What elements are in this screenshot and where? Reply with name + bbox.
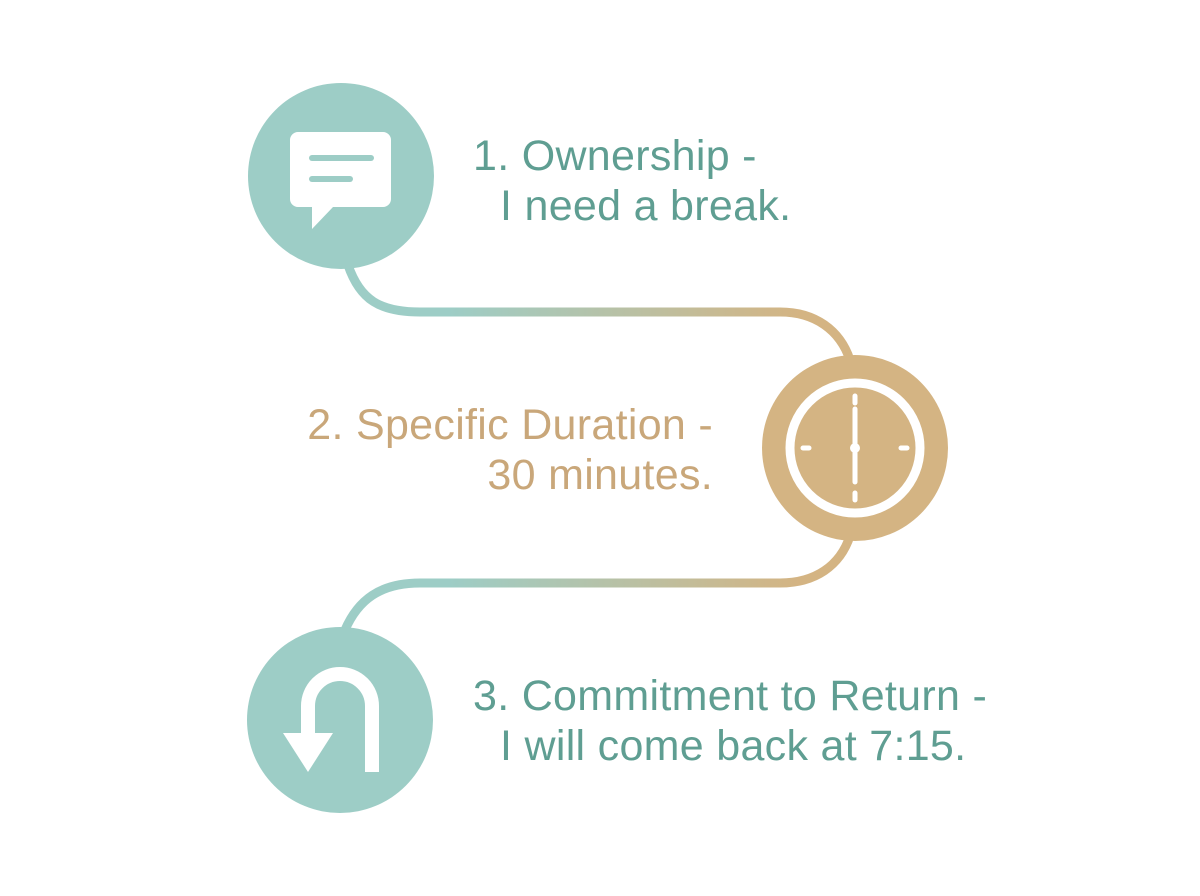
text: step 2: 2. Specific Duration - — [307, 401, 713, 449]
text: step 2 — [307, 401, 713, 499]
text: step 1 — [473, 132, 791, 230]
text: step 1: I need a break. — [500, 182, 791, 230]
text: step 1: 1. Ownership - — [473, 132, 757, 180]
text: step 2: 30 minutes. — [487, 451, 713, 499]
icon: speech bubble — [248, 83, 434, 269]
text: step 3: I will come back at 7:15. — [500, 722, 966, 770]
text: step 3: 3. Commitment to Return - — [473, 672, 987, 720]
connector 1 — [348, 265, 850, 360]
icon: u-turn arrow — [247, 627, 433, 813]
text: step 3 — [473, 672, 987, 770]
icon: clock — [762, 355, 948, 541]
connector 2 — [345, 536, 850, 630]
